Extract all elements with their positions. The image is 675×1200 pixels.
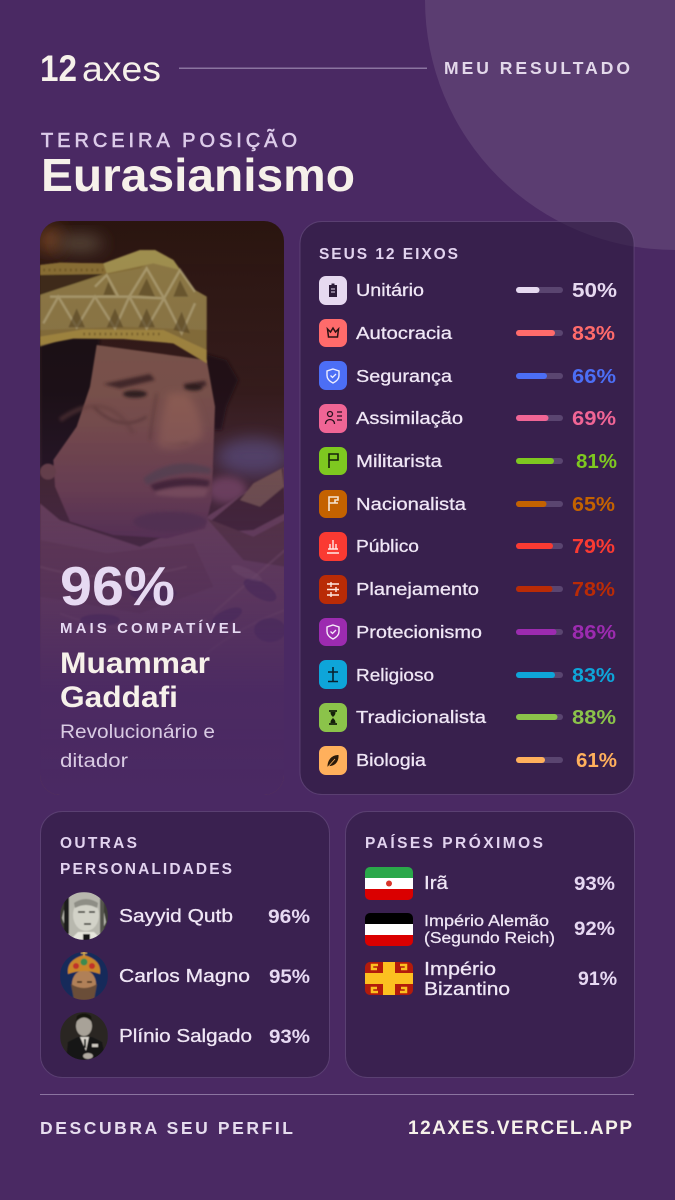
person: Sayyid Qutb: 96% xyxy=(268,906,310,928)
row: Protecionismo: Protecionismo xyxy=(356,622,482,642)
row: Público: Público xyxy=(356,536,419,556)
logo: 12 axes: 12 xyxy=(40,48,77,89)
row: Militarista: Militarista xyxy=(356,451,442,471)
personality description: Revolucionário e xyxy=(60,722,215,743)
row: Nacionalista xyxy=(319,490,615,518)
panel heading: SEUS 12 EIXOS xyxy=(319,246,458,263)
country: Império Alemão xyxy=(365,913,615,947)
country: Irã xyxy=(365,867,615,900)
row: Nacionalista: Nacionalista xyxy=(356,494,466,514)
row: Unitário: Unitário xyxy=(356,280,424,300)
personality description: ditador xyxy=(60,751,129,772)
personality description xyxy=(60,722,215,772)
row: Planejamento: Planejamento xyxy=(356,579,479,599)
panel: featured personality xyxy=(37,220,290,797)
logo: 12 axes: axes xyxy=(82,50,161,89)
row: Público xyxy=(319,532,615,561)
row: Assimilação: 69% xyxy=(572,407,616,430)
country: Império Bizantino xyxy=(365,961,617,996)
row: Unitário xyxy=(319,276,617,305)
panel: seus 12 eixos xyxy=(300,222,634,794)
row: Tradicionalista xyxy=(319,703,616,732)
facial shading xyxy=(60,374,212,532)
country: Império Bizantino: Bizantino xyxy=(424,978,510,999)
country: Irã: 93% xyxy=(574,873,615,895)
row: Público: 79% xyxy=(572,535,615,558)
row: Planejamento: 78% xyxy=(572,578,615,601)
personality name xyxy=(60,647,210,714)
row: Assimilação: Assimilação xyxy=(356,408,463,428)
row: Assimilação xyxy=(319,404,616,433)
row: Tradicionalista: 88% xyxy=(572,706,616,729)
purple gradient overlay xyxy=(40,311,284,795)
row: Segurança: 66% xyxy=(572,365,616,388)
row: Unitário: 50% xyxy=(572,279,617,302)
personality name: Muammar xyxy=(60,647,210,680)
country: Império Bizantino: 91% xyxy=(578,968,617,990)
match percentage: 96%: 96% xyxy=(60,555,175,617)
row: Religioso: 83% xyxy=(572,664,615,687)
decorative circle top right xyxy=(425,0,675,250)
person: Plínio Salgado xyxy=(60,1012,310,1060)
row: Autocracia: 83% xyxy=(572,322,615,345)
label: mais compatível: MAIS COMPATÍVEL xyxy=(60,620,241,637)
row: Protecionismo xyxy=(319,618,616,646)
person: Plínio Salgado: Plínio Salgado xyxy=(119,1025,252,1046)
header divider line xyxy=(179,68,427,69)
logo: 12 axes xyxy=(40,48,161,89)
country: Império Alemão: 92% xyxy=(574,918,615,940)
row: Planejamento xyxy=(319,575,615,604)
row: Biologia: Biologia xyxy=(356,750,426,770)
person: Carlos Magno: Carlos Magno xyxy=(119,965,250,986)
row: Protecionismo: 86% xyxy=(572,621,616,644)
row: Militarista xyxy=(319,447,617,475)
row: Tradicionalista: Tradicionalista xyxy=(356,707,486,727)
row: Segurança xyxy=(319,361,616,390)
row: Biologia xyxy=(319,746,617,775)
person: Sayyid Qutb: Sayyid Qutb xyxy=(119,905,233,926)
row: Autocracia: Autocracia xyxy=(356,323,452,343)
person: Sayyid Qutb xyxy=(60,892,310,940)
person: Carlos Magno xyxy=(60,951,310,1000)
row: Religioso xyxy=(319,660,615,689)
footer call to action: DESCUBRA SEU PERFIL xyxy=(40,1118,293,1138)
person: Carlos Magno: 95% xyxy=(269,966,310,988)
country: Irã: Irã xyxy=(424,872,449,893)
country: Império Alemão: (Segundo Reich) xyxy=(424,930,555,947)
panel heading: PAÍSES PRÓXIMOS xyxy=(365,834,543,852)
row: Autocracia xyxy=(319,319,615,347)
panel heading: OUTRAS xyxy=(60,835,137,852)
country: Império Bizantino: Império xyxy=(424,958,496,979)
country: Império Alemão: Império Alemão xyxy=(424,913,549,930)
eyebrow: terceira posição: TERCEIRA POSIÇÃO xyxy=(41,128,297,152)
footer divider xyxy=(40,1094,634,1095)
panel: países próximos xyxy=(346,812,634,1078)
row: Nacionalista: 65% xyxy=(572,493,615,516)
panel: outras personalidades xyxy=(40,812,330,1078)
hair xyxy=(40,335,238,470)
header label: meu resultado: MEU RESULTADO xyxy=(444,58,630,78)
panel heading xyxy=(60,835,232,878)
row: Biologia: 61% xyxy=(576,749,617,772)
hat xyxy=(40,250,207,363)
person: Plínio Salgado: 93% xyxy=(269,1026,310,1048)
face xyxy=(40,345,215,538)
row: Segurança: Segurança xyxy=(356,366,452,386)
row: Religioso: Religioso xyxy=(356,665,434,685)
body and robe xyxy=(40,467,286,797)
row: Militarista: 81% xyxy=(576,450,617,473)
personality name: Gaddafi xyxy=(60,681,178,714)
title: Eurasianismo: Eurasianismo xyxy=(41,149,355,201)
panel heading: PERSONALIDADES xyxy=(60,861,232,878)
portrait photo xyxy=(37,220,290,797)
footer url: 12AXES.VERCEL.APP xyxy=(408,1118,632,1139)
